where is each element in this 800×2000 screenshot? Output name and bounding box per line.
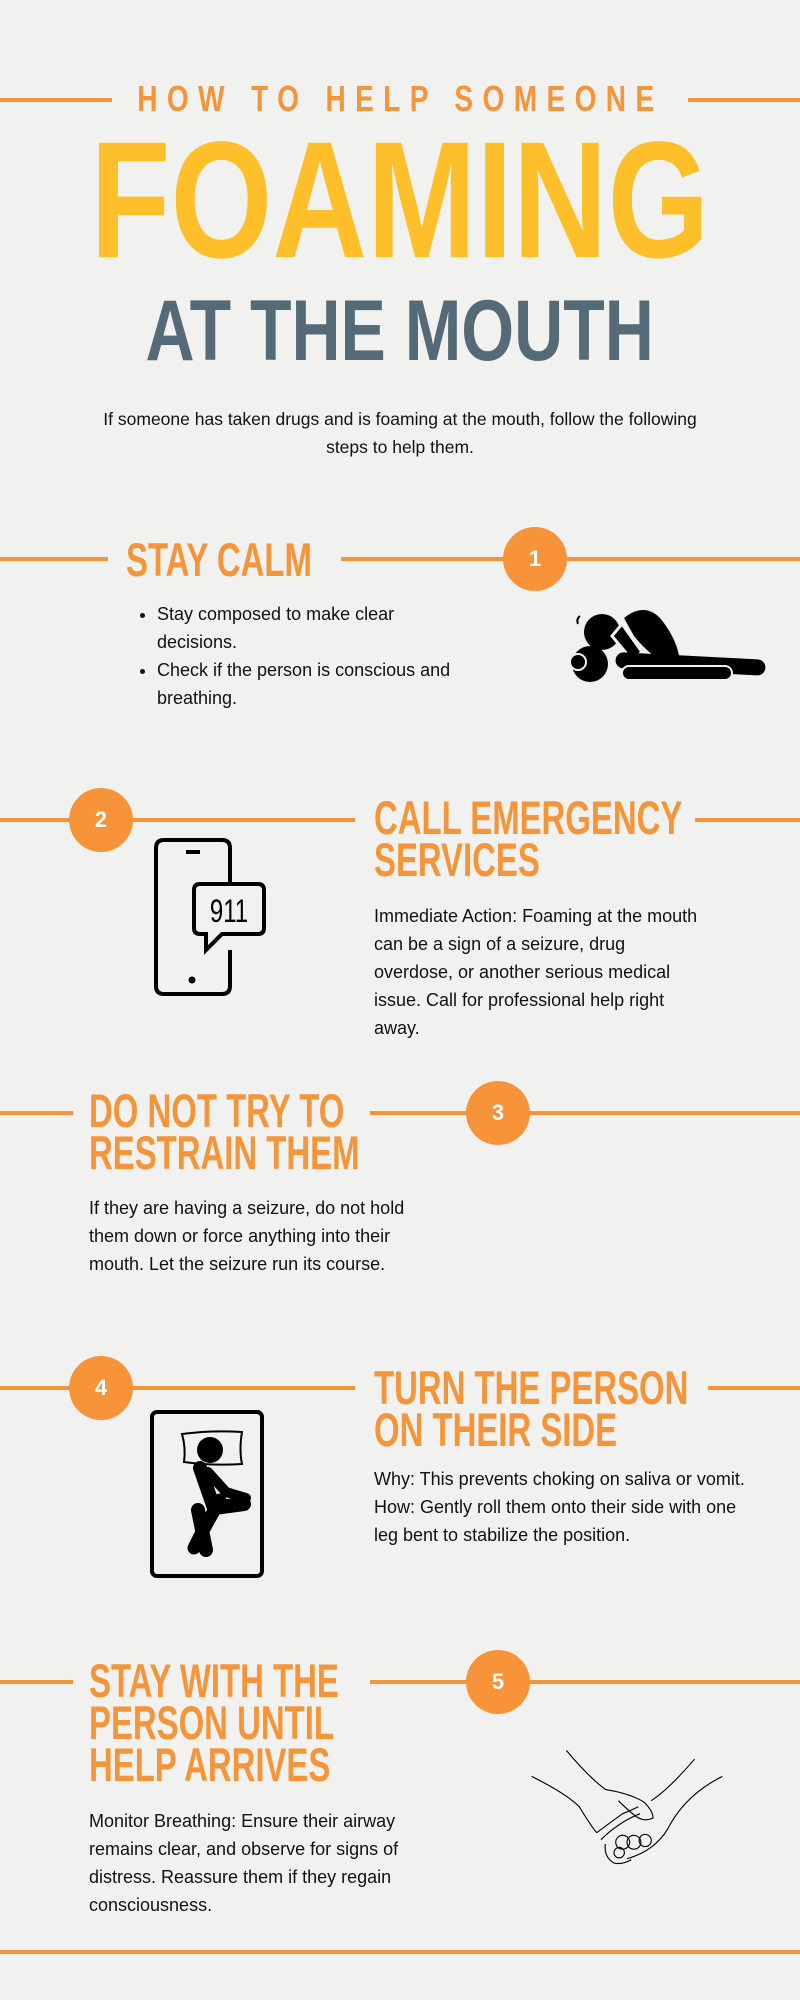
icon: person helping lying person <box>571 610 766 682</box>
circle 1: 1 <box>529 546 541 571</box>
bottom line <box>0 1950 800 1954</box>
heading 4: TURN THE PERSON <box>374 1361 688 1414</box>
heading 3 <box>89 1084 360 1179</box>
subtitle: HOW TO HELP SOMEONE <box>137 78 663 119</box>
heading 3: DO NOT TRY TO <box>89 1084 344 1137</box>
icon: person sleeping on side in bed <box>150 1410 264 1578</box>
text 3: If they are having a seizure, do not hold them down or force anything into their mouth. Let the seizure run its course. <box>89 1198 404 1274</box>
circle 5: 5 <box>492 1669 504 1694</box>
circle 3 <box>466 1081 530 1145</box>
section 3 <box>0 1081 800 1274</box>
circle 4: 4 <box>95 1375 107 1400</box>
title: FOAMING: FOAMING <box>90 108 710 293</box>
circle 2 <box>69 788 133 852</box>
heading 2: CALL EMERGENCY <box>374 791 682 844</box>
text 5: Monitor Breathing: Ensure their airway remains clear, and observe for signs of distress. Reassure them if they regain consciousness. <box>89 1811 398 1915</box>
heading 5: PERSON UNTIL <box>89 1696 334 1749</box>
intro text: If someone has taken drugs and is foaming at the mouth, follow the following steps to help them. <box>103 409 697 457</box>
icon: phone 911: 911 <box>210 893 248 929</box>
bullets 1 <box>140 604 450 708</box>
circle 4 <box>69 1356 133 1420</box>
top line right <box>688 98 800 102</box>
circle 3: 3 <box>492 1100 504 1125</box>
bullets 1: Check if the person is conscious and breathing. <box>157 660 450 708</box>
title: AT THE MOUTH: AT THE MOUTH <box>146 283 654 379</box>
heading 4 <box>374 1361 688 1456</box>
heading 5: STAY WITH THE <box>89 1654 339 1707</box>
heading 4: ON THEIR SIDE <box>374 1403 617 1456</box>
circle 5 <box>466 1650 530 1714</box>
heading 2: SERVICES <box>374 833 540 886</box>
circle 1 <box>503 527 567 591</box>
heading 5 <box>89 1654 339 1791</box>
text 2: Immediate Action: Foaming at the mouth can be a sign of a seizure, drug overdose, or another serious medical issue. Call for professional help right away. <box>374 906 697 1038</box>
section 5 <box>0 1650 800 1915</box>
heading 3: RESTRAIN THEM <box>89 1126 360 1179</box>
bullets 1: Stay composed to make clear decisions. <box>157 604 394 652</box>
section 2 <box>0 788 800 1038</box>
section 1 <box>0 527 800 708</box>
icon: phone 911 <box>154 838 266 996</box>
heading 1: STAY CALM <box>126 533 312 586</box>
icon: holding hands <box>532 1750 722 1864</box>
heading 2 <box>374 791 682 886</box>
top line left <box>0 98 112 102</box>
circle 2: 2 <box>95 807 107 832</box>
heading 5: HELP ARRIVES <box>89 1738 330 1791</box>
section 4 <box>0 1356 800 1578</box>
text 4: Why: This prevents choking on saliva or vomit. How: Gently roll them onto their side with one leg bent to stabilize the position. <box>374 1469 745 1545</box>
